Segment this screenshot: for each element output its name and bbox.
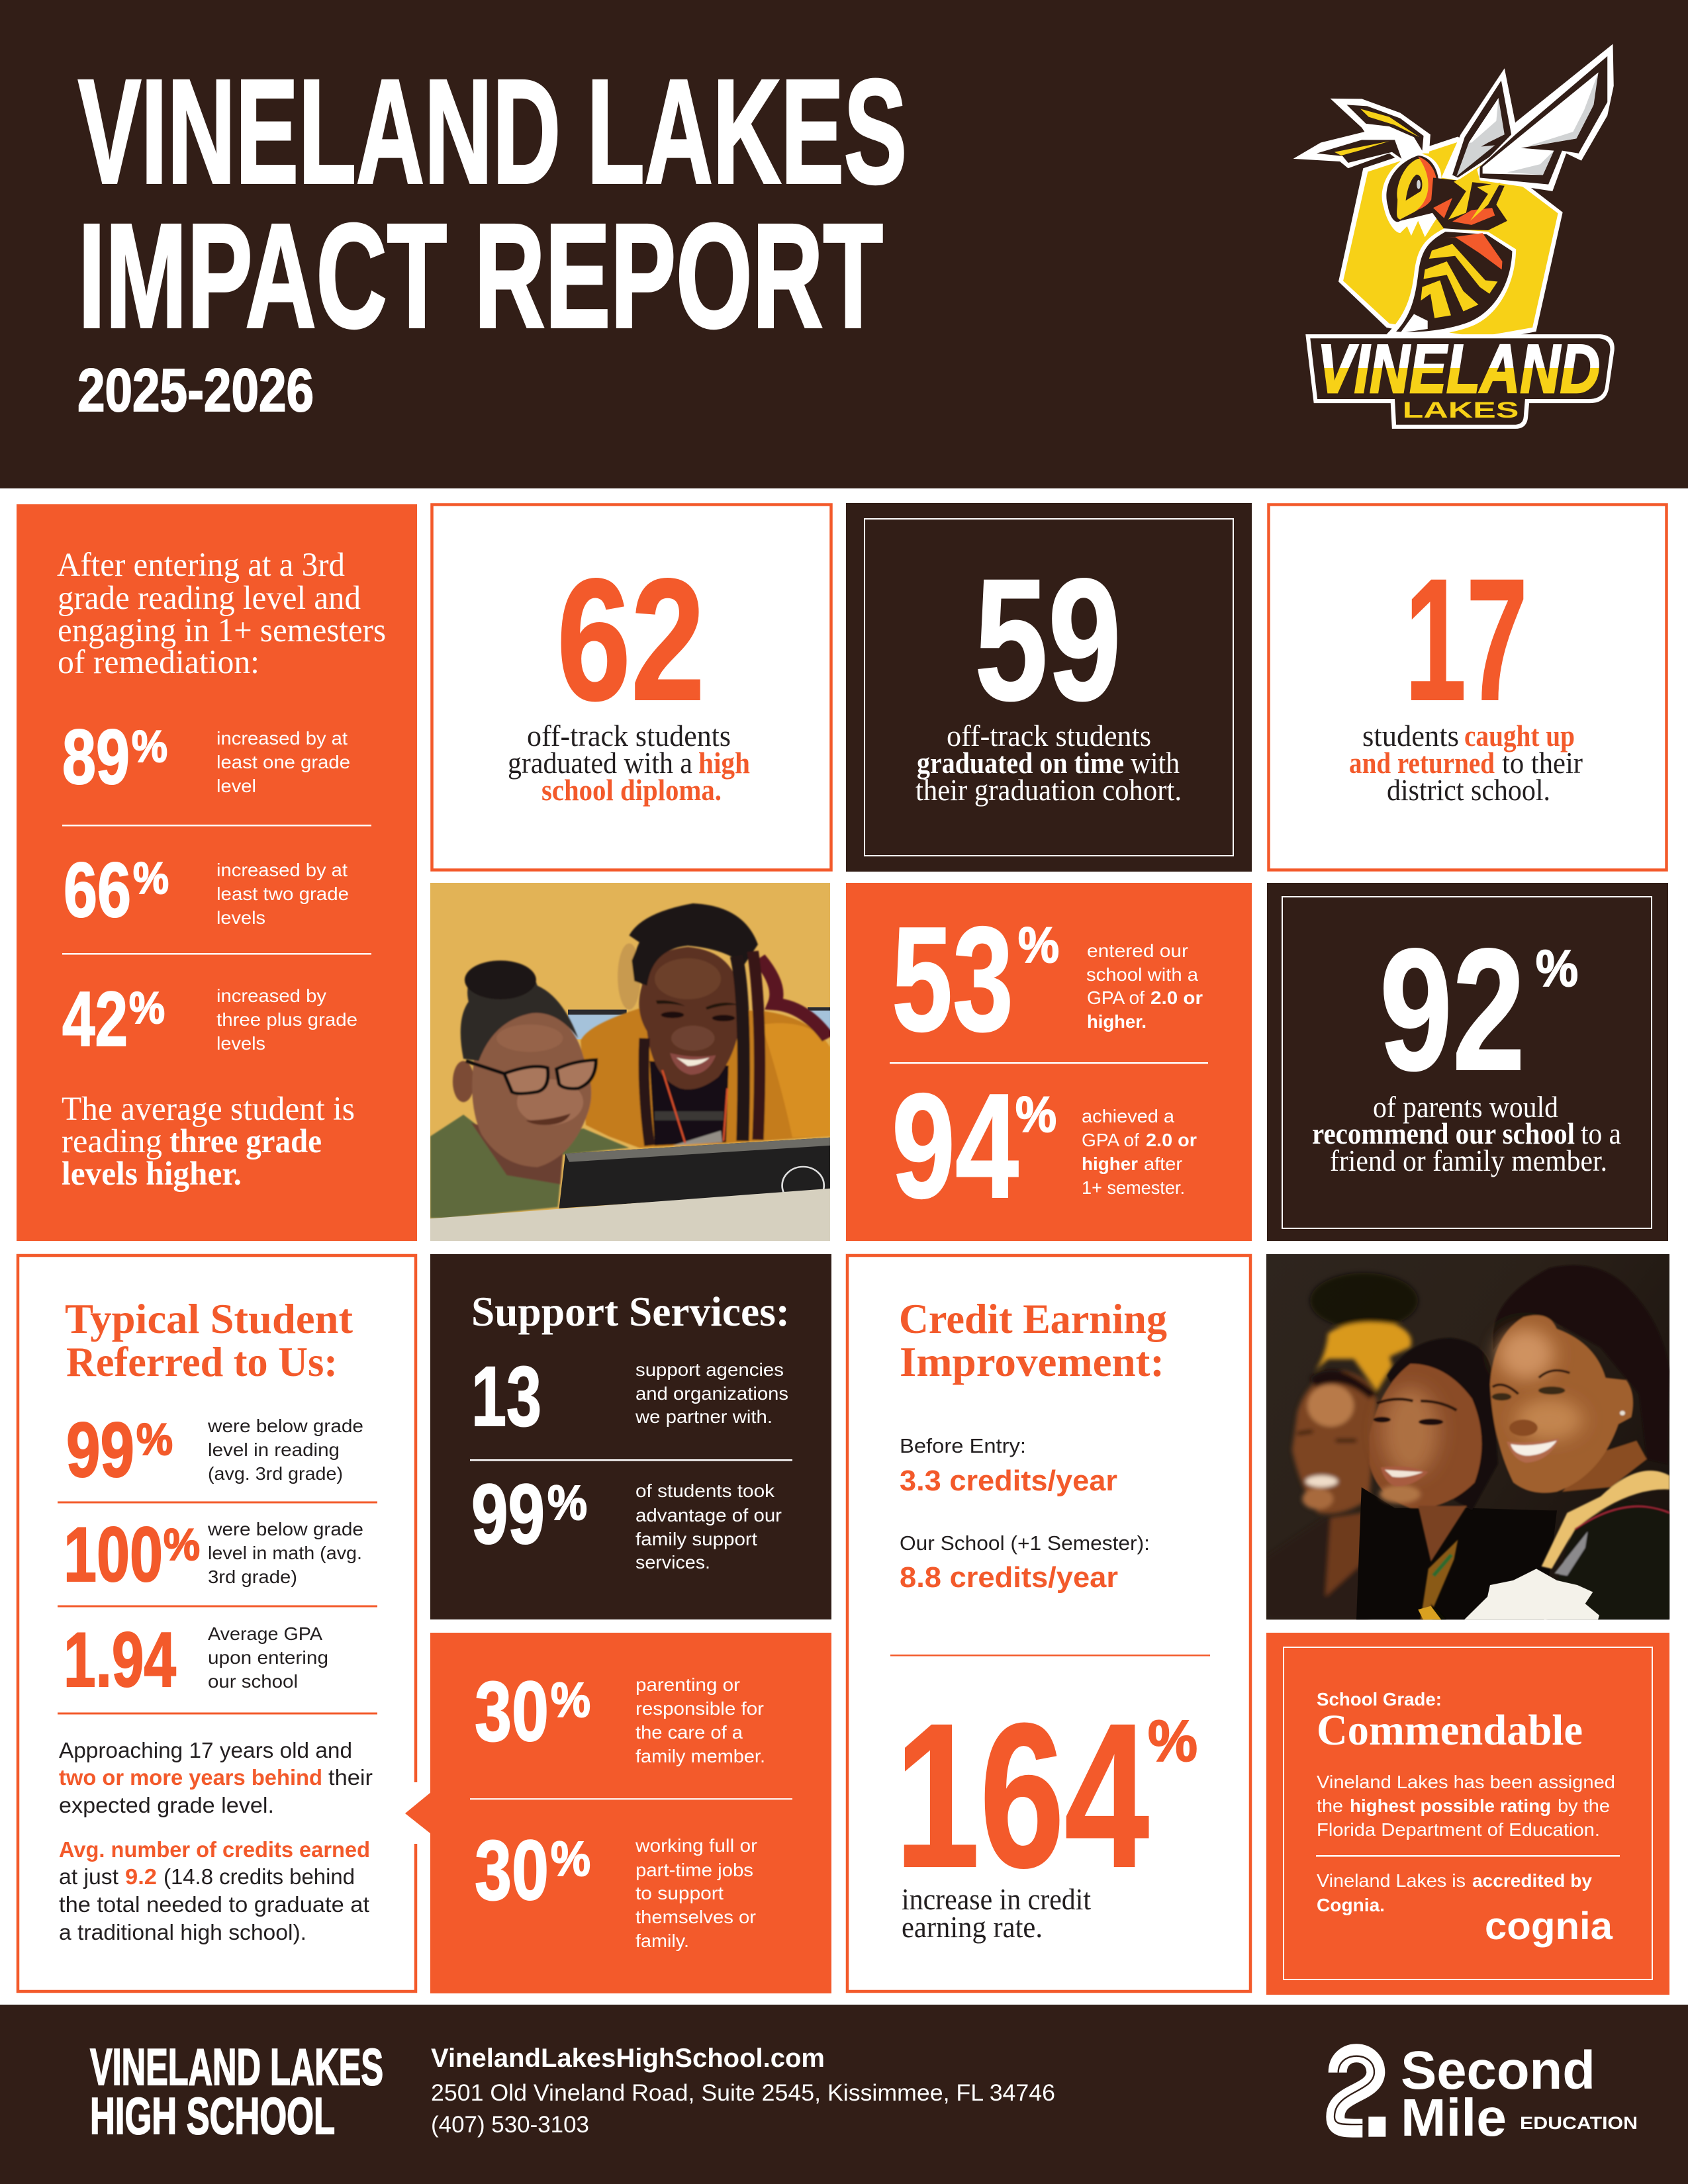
- stat: 42%: 42: [62, 976, 128, 1062]
- stat: 94%: %: [1015, 1087, 1056, 1143]
- stat: 99%: services.: [635, 1552, 710, 1572]
- caption: [902, 1882, 1091, 1944]
- logo: Cognia: cognia: [1485, 1905, 1613, 1948]
- credits paragraph: at just: [59, 1864, 118, 1889]
- number 62: 62: [557, 543, 705, 737]
- stat: 53%: 53: [892, 895, 1013, 1062]
- stat: 99%: %: [136, 1414, 173, 1465]
- photo: three graduates: [1266, 1254, 1669, 1619]
- grade heading: Commendable: [1317, 1706, 1583, 1754]
- stat: 89%: %: [132, 721, 167, 772]
- logo: Second Mile Education: Mile: [1401, 2088, 1507, 2147]
- credits comparison: [900, 1434, 1150, 1594]
- stat: 1.94: our school: [208, 1671, 298, 1692]
- stat: 99%: level in reading: [208, 1439, 340, 1460]
- stat: 53%: [892, 895, 1203, 1062]
- stat: 30% parenting: the care of a: [635, 1722, 743, 1743]
- stat: 30% parenting: responsible for: [635, 1698, 764, 1719]
- number 17: 17: [1405, 543, 1528, 737]
- closing statement: [62, 1091, 355, 1193]
- closing statement: reading: [62, 1123, 162, 1160]
- caption: high: [698, 746, 750, 780]
- age paragraph: two or more years behind: [59, 1765, 322, 1790]
- contact details: VinelandLakesHighSchool.com: [431, 2044, 825, 2073]
- caption: graduated on time: [917, 746, 1124, 780]
- caption: students: [1362, 719, 1459, 752]
- stat: 94%: 1+ semester.: [1082, 1177, 1185, 1198]
- stat: 99%: [66, 1406, 363, 1493]
- panel: 17 returned: [1268, 504, 1667, 870]
- caption: recommend our school: [1312, 1116, 1575, 1150]
- contact details: [431, 2044, 1055, 2138]
- stat: 53%: school with a: [1086, 964, 1198, 985]
- title: [78, 49, 907, 359]
- caption: graduated with a: [508, 746, 692, 780]
- rating text: [1317, 1772, 1615, 1840]
- caption: their graduation cohort.: [915, 773, 1182, 807]
- stat: 94%: [892, 1062, 1197, 1229]
- panel: 59 on time: [846, 503, 1252, 872]
- age paragraph: their: [328, 1765, 373, 1790]
- panel: support services: [430, 1254, 831, 1619]
- credits comparison: Before Entry:: [900, 1434, 1026, 1457]
- caption: [508, 719, 750, 807]
- credits comparison: Our School (+1 Semester):: [900, 1531, 1150, 1555]
- stat: 1.94: 1.94: [64, 1616, 176, 1703]
- stat: 89%: least one grade: [216, 752, 350, 772]
- stat: 30% working: themselves or: [635, 1907, 756, 1927]
- stat: 13: [471, 1349, 788, 1444]
- panel: typical student: [18, 1255, 418, 1991]
- grade heading: School Grade:: [1317, 1689, 1442, 1709]
- stat: 53%: GPA of: [1087, 987, 1145, 1008]
- stat: 30% parenting: 30: [475, 1664, 549, 1759]
- caption: increase in credit: [902, 1882, 1091, 1916]
- logo: Second Mile Education: [1335, 2040, 1638, 2147]
- stat: 100%: were below grade: [207, 1519, 363, 1539]
- intro text: grade reading level and: [58, 580, 361, 617]
- heading: [899, 1295, 1167, 1385]
- school name: HIGH SCHOOL: [90, 2087, 335, 2145]
- stat: 53%: entered our: [1087, 940, 1188, 961]
- rating text: the: [1317, 1796, 1343, 1816]
- logo: Vineland Lakes hornet: VINELAND: [1317, 331, 1600, 408]
- stat: 99%: of students took: [635, 1480, 775, 1501]
- caption: off-track students: [947, 719, 1151, 752]
- stat: 42%: [62, 976, 357, 1062]
- year subtitle: 2025-2026: [77, 357, 314, 424]
- number 92%: 92: [1380, 913, 1525, 1107]
- closing statement: levels higher.: [62, 1156, 242, 1193]
- caption: with: [1131, 746, 1180, 780]
- heading: Typical Student: [65, 1295, 353, 1342]
- stat: 30% working: part-time jobs: [635, 1860, 753, 1880]
- number 164%: 164: [895, 1680, 1150, 1910]
- stat: 30% working: 30: [475, 1823, 549, 1918]
- stat: 30% working: to support: [635, 1883, 724, 1903]
- panel: reading gains: [17, 504, 417, 1241]
- panel: credit earning improvement: [847, 1255, 1250, 1991]
- stat: 42%: increased by: [216, 985, 326, 1006]
- logo: Second Mile Education: EDUCATION: [1520, 2113, 1638, 2133]
- caption: friend or family member.: [1330, 1144, 1607, 1177]
- intro text: [57, 547, 386, 681]
- stat: 42%: %: [129, 983, 165, 1033]
- school name: [90, 2038, 383, 2145]
- photo: two students at a computer: [430, 883, 830, 1241]
- header band: [0, 0, 1688, 488]
- stat: 1.94: upon entering: [208, 1647, 328, 1668]
- caption: off-track students: [527, 719, 731, 752]
- rating text: Florida Department of Education.: [1317, 1819, 1600, 1840]
- panel: school grade: [1266, 1633, 1669, 1995]
- contact details: (407) 530-3103: [431, 2112, 589, 2138]
- caption: caught up: [1464, 719, 1575, 752]
- rating text: highest possible rating: [1350, 1796, 1551, 1816]
- stat: 94%: higher: [1082, 1154, 1138, 1174]
- panel: family responsibilities: [405, 1633, 831, 1993]
- stat: 89%: 89: [62, 713, 130, 800]
- intro text: of remediation:: [58, 644, 259, 681]
- credits paragraph: Avg. number of credits earned: [59, 1837, 370, 1862]
- stat: 30% parenting: [475, 1664, 765, 1766]
- caption: to a: [1581, 1116, 1621, 1150]
- panel: 92% parents: [1267, 883, 1668, 1241]
- heading: Support Services:: [471, 1288, 790, 1335]
- stat: 53%: higher.: [1087, 1011, 1147, 1032]
- stat: 30% parenting: family member.: [635, 1746, 765, 1766]
- stat: 99%: 99: [471, 1467, 545, 1562]
- stat: 100%: [64, 1511, 363, 1598]
- heading: Referred to Us:: [66, 1338, 338, 1385]
- number 164%: %: [1148, 1708, 1197, 1774]
- accreditation text: Vineland Lakes is: [1317, 1870, 1466, 1891]
- stat: 30% working: working full or: [635, 1835, 757, 1856]
- stat: 42%: three plus grade: [216, 1009, 357, 1030]
- closing statement: three grade: [169, 1123, 322, 1160]
- logo: Second Mile Education: Second: [1401, 2040, 1595, 2101]
- age paragraph: [59, 1738, 373, 1817]
- credits paragraph: 9.2: [125, 1864, 157, 1889]
- caption: [1349, 719, 1583, 807]
- credits paragraph: [59, 1837, 370, 1944]
- rating text: Vineland Lakes has been assigned: [1317, 1772, 1615, 1792]
- stat: 42%: levels: [216, 1033, 265, 1054]
- stat: 99%: [471, 1467, 782, 1572]
- credits paragraph: the total needed to graduate at: [59, 1892, 369, 1917]
- stat: 94%: achieved a: [1082, 1106, 1174, 1126]
- number 59: 59: [974, 543, 1121, 737]
- accreditation text: accredited by: [1472, 1870, 1592, 1891]
- stat: 89%: level: [216, 776, 256, 796]
- stat: 99%: were below grade: [207, 1416, 363, 1436]
- caption: [1312, 1090, 1621, 1177]
- stat: 66%: least two grade: [216, 884, 349, 904]
- heading: Credit Earning: [899, 1295, 1167, 1342]
- school name: VINELAND LAKES: [90, 2038, 383, 2096]
- stat: 100%: 100: [64, 1511, 163, 1598]
- stat: 100%: 3rd grade): [208, 1567, 297, 1587]
- intro text: engaging in 1+ semesters: [58, 612, 386, 649]
- stat: 66%: %: [133, 853, 169, 903]
- title: VINELAND LAKES: [78, 49, 907, 214]
- rating text: by the: [1558, 1796, 1610, 1816]
- logo: Vineland Lakes hornet: LAKES: [1403, 398, 1519, 423]
- stat: 66%: [64, 846, 349, 933]
- stat: 99%: %: [547, 1475, 587, 1530]
- credits paragraph: (14.8 credits behind: [164, 1864, 355, 1889]
- stat: 89%: [62, 713, 350, 800]
- caption: school diploma.: [541, 773, 722, 807]
- stat: 30% parenting: %: [551, 1672, 590, 1727]
- caption: earning rate.: [902, 1910, 1043, 1944]
- stat: 1.94: [64, 1616, 328, 1703]
- intro text: After entering at a 3rd: [57, 547, 345, 584]
- caption: district school.: [1387, 773, 1550, 807]
- heading: Improvement:: [900, 1338, 1164, 1385]
- credits paragraph: a traditional high school).: [59, 1920, 306, 1944]
- stat: 13: and organizations: [635, 1383, 788, 1404]
- stat: 66%: increased by at: [216, 860, 348, 880]
- stat: 100%: level in math (avg.: [208, 1543, 362, 1563]
- stat: 99%: (avg. 3rd grade): [208, 1463, 343, 1484]
- closing statement: The average student is: [62, 1091, 355, 1128]
- heading: [65, 1295, 353, 1385]
- stat: 13: support agencies: [635, 1359, 784, 1380]
- caption: and returned: [1349, 746, 1495, 780]
- stat: 66%: levels: [216, 907, 265, 928]
- stat: 99%: 99: [66, 1406, 134, 1493]
- stat: 94%: after: [1144, 1154, 1182, 1174]
- title: IMPACT REPORT: [78, 193, 883, 359]
- age paragraph: Approaching 17 years old and: [59, 1738, 352, 1762]
- stat: 1.94: Average GPA: [208, 1623, 322, 1644]
- credits comparison: 8.8 credits/year: [900, 1561, 1118, 1594]
- number 92%: %: [1536, 939, 1578, 997]
- stat: 66%: 66: [64, 846, 131, 933]
- stat: 89%: increased by at: [216, 728, 348, 749]
- stat: 53%: %: [1018, 917, 1059, 974]
- stat: 30% working: family.: [635, 1931, 689, 1951]
- stat: 30% parenting: parenting or: [635, 1674, 740, 1695]
- caption: to their: [1502, 746, 1583, 780]
- accreditation text: Cognia.: [1317, 1895, 1385, 1915]
- stat: 99%: advantage of our: [635, 1505, 782, 1525]
- accreditation text: [1317, 1870, 1592, 1915]
- caption: [915, 719, 1182, 807]
- panel: GPA stats: [846, 883, 1252, 1241]
- arrow pointing to typical student panel: [405, 1792, 431, 1834]
- stat: 94%: 94: [892, 1062, 1019, 1229]
- panel: 62 graduated: [432, 504, 831, 870]
- stat: 13: 13: [471, 1349, 541, 1444]
- stat: 99%: family support: [635, 1529, 757, 1549]
- stat: 94%: GPA of: [1082, 1130, 1139, 1150]
- stat: 94%: 2.0 or: [1146, 1130, 1197, 1150]
- contact details: 2501 Old Vineland Road, Suite 2545, Kissimmee, FL 34746: [431, 2080, 1055, 2106]
- logo: Vineland Lakes hornet: [1293, 44, 1615, 429]
- caption: of parents would: [1373, 1090, 1558, 1124]
- credits comparison: 3.3 credits/year: [900, 1465, 1117, 1497]
- age paragraph: expected grade level.: [59, 1793, 274, 1817]
- stat: 53%: 2.0 or: [1150, 987, 1203, 1008]
- footer band: [0, 2005, 1688, 2184]
- stat: 30% working: [475, 1823, 757, 1951]
- stat: 100%: %: [164, 1520, 200, 1570]
- stat: 13: we partner with.: [635, 1406, 773, 1427]
- stat: 30% working: %: [551, 1831, 590, 1886]
